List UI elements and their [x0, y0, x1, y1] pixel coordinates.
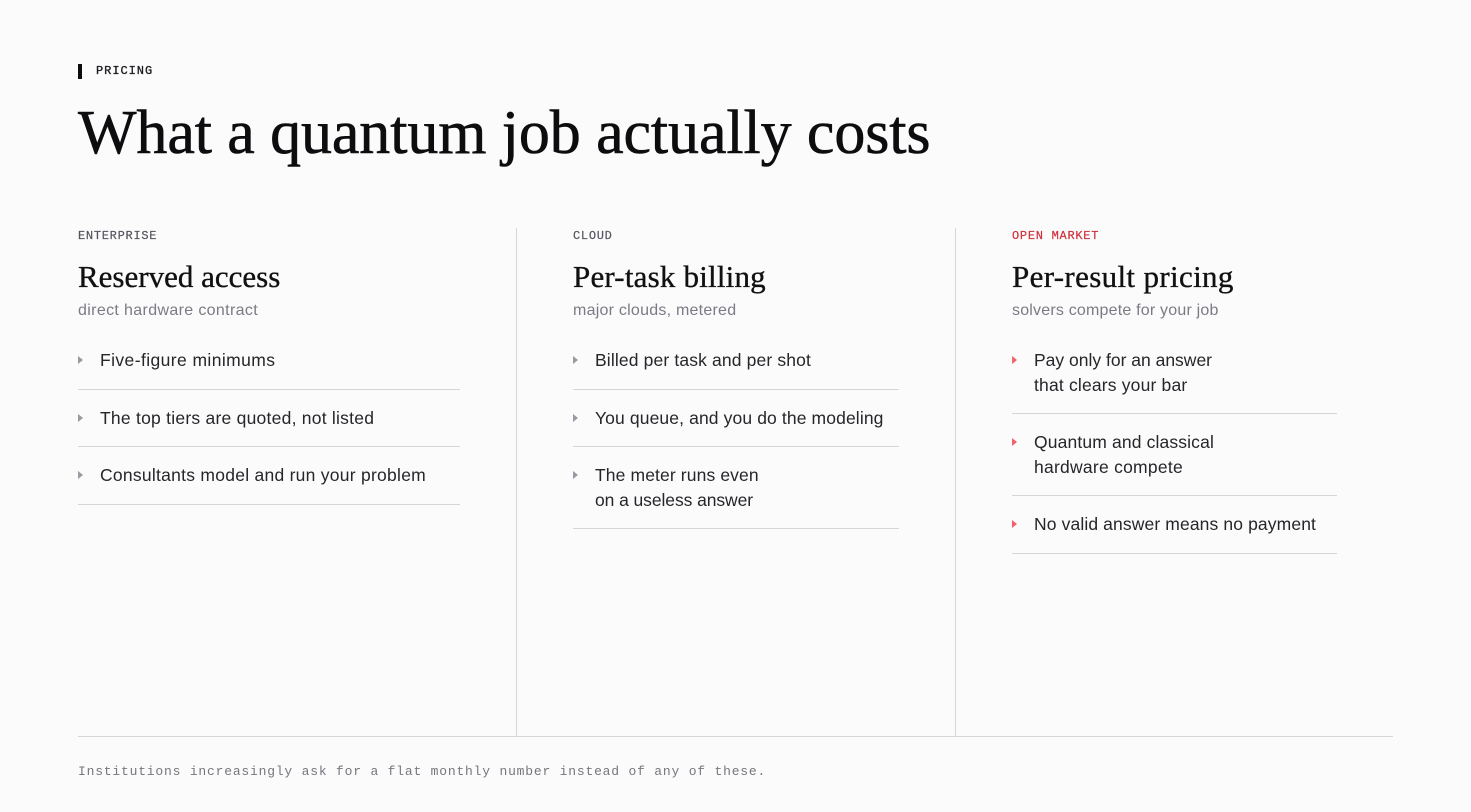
eyebrow label: PRICING [96, 64, 153, 78]
open market tag: OPEN MARKET [1012, 229, 1099, 243]
bullet text: The meter runs even [595, 465, 759, 485]
bullet icon [573, 356, 578, 364]
enterprise heading: Reserved access [78, 259, 280, 294]
panel: enterprise [78, 229, 460, 505]
bullet text: No valid answer means no payment [1034, 514, 1316, 534]
bullet text: You queue, and you do the modeling [595, 408, 884, 428]
bullet icon [1012, 438, 1017, 446]
bullet text: Five-figure minimums [100, 350, 275, 370]
bullet text: Billed per task and per shot [595, 350, 811, 370]
open market subtitle: solvers compete for your job [1012, 302, 1219, 319]
panel: cloud [573, 229, 899, 529]
cloud tag: CLOUD [573, 229, 613, 243]
panel: open market [1012, 229, 1337, 554]
bullet text: hardware compete [1034, 457, 1183, 477]
title: What a quantum job actually costs [78, 99, 930, 167]
bullet icon [78, 471, 83, 479]
footnote: Institutions increasingly ask for a flat monthly number instead of any of these. [78, 764, 766, 779]
bullet icon [573, 414, 578, 422]
bullet text: Pay only for an answer [1034, 350, 1212, 370]
bullet icon [78, 356, 83, 364]
cloud heading: Per-task billing [573, 259, 766, 294]
cloud subtitle: major clouds, metered [573, 302, 736, 319]
bullet text: Consultants model and run your problem [100, 465, 426, 485]
bullet text: that clears your bar [1034, 375, 1187, 395]
bullet text [595, 465, 759, 510]
bullet icon [78, 414, 83, 422]
bullet text [1034, 432, 1214, 477]
eyebrow marker bar [78, 64, 82, 79]
enterprise tag: ENTERPRISE [78, 229, 157, 243]
bullet icon [573, 471, 578, 479]
bullet text [1034, 350, 1212, 395]
bullet icon [1012, 520, 1017, 528]
open market heading: Per-result pricing [1012, 259, 1234, 294]
bullet icon [1012, 356, 1017, 364]
eyebrow: pricing [78, 64, 153, 79]
enterprise subtitle: direct hardware contract [78, 302, 258, 319]
bullet text: The top tiers are quoted, not listed [100, 408, 374, 428]
bullet text: Quantum and classical [1034, 432, 1214, 452]
bullet text: on a useless answer [595, 490, 753, 510]
